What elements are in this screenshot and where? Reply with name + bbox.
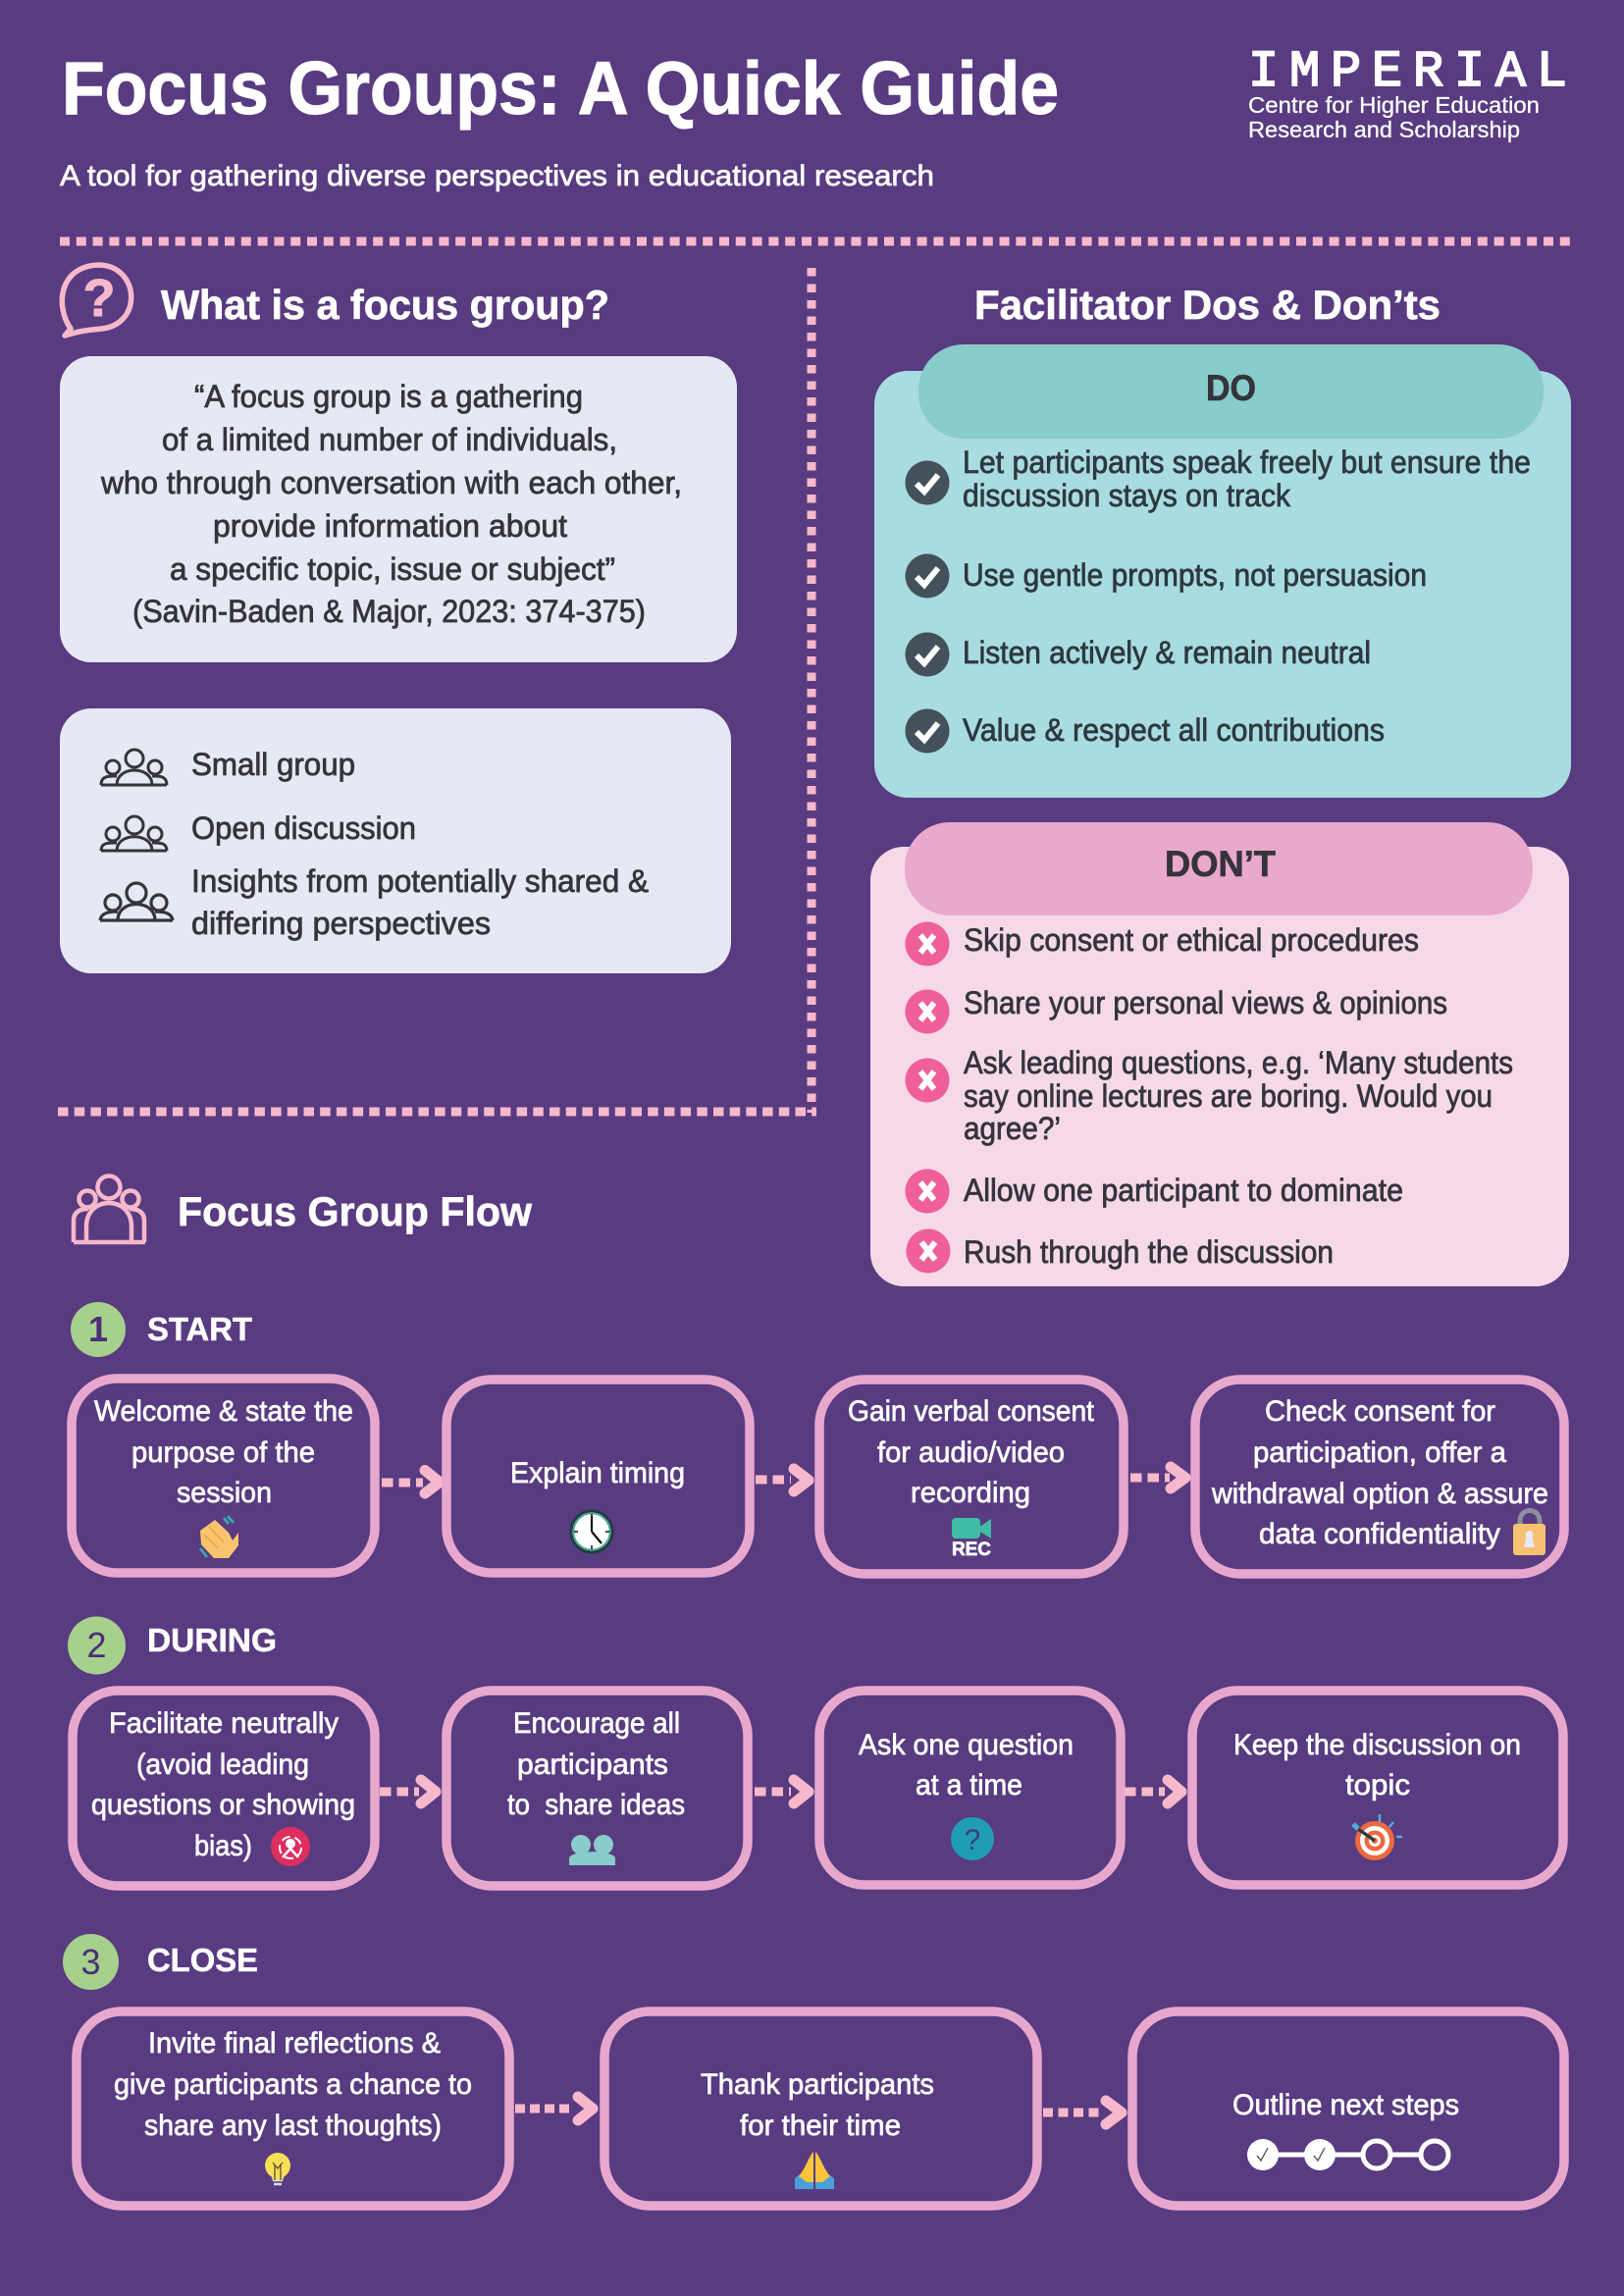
badge 3	[63, 1934, 119, 1990]
step: explain timing	[446, 1380, 750, 1573]
section 3: close	[63, 1934, 1564, 2206]
don't items: Skip consent or ethical procedures	[964, 922, 1419, 958]
panel: do: DO	[1206, 368, 1256, 408]
panel: quote: who through conversation with each other,	[100, 465, 682, 500]
don't items	[905, 922, 1513, 1274]
icon: clock	[571, 1511, 612, 1552]
logo: Imperial Centre for Higher Education Research and Scholarship	[1248, 43, 1567, 142]
panel: quote: a specific topic, issue or subject”	[170, 551, 615, 587]
heading: what is a focus group: What is a focus group?	[161, 282, 609, 328]
step: check consent: data confidentiality	[1259, 1518, 1500, 1550]
icon: bias	[271, 1827, 310, 1866]
icon: praying hands	[795, 2152, 834, 2189]
icon: progress steps	[1247, 2139, 1448, 2170]
icon: people small group	[101, 750, 167, 785]
step: welcome: Welcome & state the	[94, 1395, 353, 1428]
do items	[905, 444, 1531, 754]
step: keep on topic: topic	[1345, 1769, 1410, 1801]
panel: quote: of a limited number of individuals,	[162, 422, 617, 457]
step: explain timing: Explain timing	[510, 1457, 685, 1489]
don't items: Allow one participant to dominate	[964, 1173, 1403, 1208]
icon: waving hand	[200, 1516, 238, 1558]
arrow	[1043, 2101, 1122, 2124]
step: gain consent	[819, 1380, 1124, 1574]
step: gain consent: recording	[911, 1477, 1030, 1509]
step: thank participants	[604, 2011, 1037, 2206]
panel: quote: “A focus group is a gathering	[194, 379, 583, 414]
logo: Imperial Centre for Higher Education Research and Scholarship: IMPERIAL	[1248, 43, 1567, 101]
logo: Imperial Centre for Higher Education Research and Scholarship: Research and Scholarship	[1248, 117, 1520, 142]
panel: quote: provide information about	[213, 508, 567, 544]
icon: target	[1353, 1814, 1402, 1860]
label: during: DURING	[147, 1622, 277, 1658]
header: do	[918, 344, 1544, 439]
icon: light bulb	[265, 2153, 290, 2184]
step: next steps	[1132, 2011, 1564, 2206]
section 2: during	[68, 1617, 1563, 1886]
icon: question speech bubble	[62, 265, 131, 336]
step: final reflections: give participants a chance to	[114, 2068, 472, 2101]
step: encourage: participants	[517, 1748, 668, 1781]
step: facilitate neutrally: (avoid leading	[136, 1748, 309, 1781]
badge 1	[71, 1302, 126, 1357]
label: open discussion: Open discussion	[191, 810, 416, 846]
panel: key features: differing perspectives	[191, 906, 491, 941]
arrow	[380, 1780, 436, 1803]
step: keep on topic	[1192, 1691, 1563, 1885]
panel: do	[874, 344, 1571, 798]
step: check consent: participation, offer a	[1253, 1436, 1506, 1469]
section 1: start	[71, 1302, 1564, 1574]
label: close: CLOSE	[147, 1942, 258, 1978]
panel: key features	[60, 708, 731, 973]
step: gain consent: Gain verbal consent	[848, 1395, 1095, 1428]
panel: don't	[870, 822, 1569, 1286]
heading: focus group flow: Focus Group Flow	[178, 1188, 532, 1234]
icon: people open discussion	[101, 816, 167, 851]
don't items: Ask leading questions, e.g. ‘Many students	[964, 1045, 1513, 1080]
don't items: Share your personal views & opinions	[964, 985, 1447, 1020]
step: next steps: Outline next steps	[1232, 2089, 1459, 2121]
step: keep on topic: Keep the discussion on	[1233, 1729, 1521, 1761]
step: facilitate neutrally: bias)	[194, 1830, 252, 1862]
arrow	[515, 2097, 593, 2120]
arrow	[1125, 1780, 1181, 1803]
label: start: START	[147, 1311, 252, 1347]
step: thank participants: for their time	[740, 2110, 901, 2142]
icon: padlock	[1513, 1511, 1545, 1555]
step: final reflections: Invite final reflections &	[148, 2027, 441, 2060]
badge 1: 1	[88, 1309, 108, 1349]
step: welcome: session	[177, 1477, 272, 1509]
badge 2	[68, 1617, 126, 1674]
arrow	[382, 1470, 440, 1493]
panel: quote	[60, 356, 737, 662]
step: check consent: withdrawal option & assure	[1211, 1478, 1548, 1510]
don't items: say online lectures are boring. Would you	[964, 1078, 1493, 1114]
icon: question circle: ?	[965, 1824, 980, 1856]
icon: question speech bubble: ?	[82, 269, 116, 328]
step: check consent: Check consent for	[1265, 1395, 1495, 1428]
step: final reflections	[77, 2011, 509, 2206]
do items: Value & respect all contributions	[963, 712, 1385, 748]
heading: facilitator dos and don'ts: Facilitator Dos & Don’ts	[974, 282, 1441, 328]
don't items: Rush through the discussion	[964, 1234, 1334, 1270]
step: gain consent: for audio/video	[877, 1436, 1065, 1469]
step: one question: Ask one question	[859, 1729, 1074, 1761]
step: one question: at a time	[916, 1769, 1022, 1801]
header: don't	[905, 822, 1533, 915]
step: one question	[819, 1691, 1121, 1885]
step: check consent	[1195, 1380, 1564, 1574]
don't items: agree?’	[964, 1111, 1061, 1146]
label: small group: Small group	[191, 747, 355, 782]
do items: Let participants speak freely but ensure the	[963, 444, 1531, 480]
panel: don't: DON’T	[1165, 844, 1276, 884]
icon: focus group flow people	[74, 1175, 145, 1242]
icon: video camera rec: REC	[952, 1539, 991, 1560]
icon: video camera rec	[952, 1518, 991, 1560]
panel: quote: (Savin-Baden & Major, 2023: 374-375)	[132, 594, 646, 629]
icon: two people	[569, 1835, 615, 1865]
badge 2: 2	[86, 1625, 107, 1665]
step: welcome	[72, 1379, 375, 1573]
step: final reflections: share any last thoughts)	[144, 2110, 442, 2142]
step: encourage: to share ideas	[507, 1789, 685, 1821]
badge 3: 3	[80, 1942, 101, 1982]
label: insights: Insights from potentially shared &	[191, 863, 649, 899]
do items: Use gentle prompts, not persuasion	[963, 557, 1427, 593]
step: encourage	[446, 1691, 748, 1886]
title: Focus Groups: A Quick Guide	[62, 47, 1059, 130]
step: facilitate neutrally: questions or showing	[91, 1789, 355, 1821]
arrow	[756, 1469, 809, 1491]
step: welcome: purpose of the	[131, 1436, 315, 1469]
step: encourage: Encourage all	[513, 1707, 680, 1740]
icon: question circle	[951, 1817, 994, 1860]
icon: people insights	[100, 883, 173, 920]
subtitle: A tool for gathering diverse perspectives in educational research	[60, 160, 934, 192]
do items: Listen actively & remain neutral	[963, 635, 1371, 670]
step: facilitate neutrally: Facilitate neutrally	[109, 1707, 339, 1740]
arrow	[1130, 1467, 1185, 1488]
step: thank participants: Thank participants	[701, 2068, 934, 2101]
arrow	[755, 1780, 809, 1803]
step: facilitate neutrally	[73, 1691, 375, 1886]
logo: Imperial Centre for Higher Education Research and Scholarship: Centre for Higher Education	[1248, 92, 1540, 118]
do items: discussion stays on track	[963, 478, 1291, 513]
